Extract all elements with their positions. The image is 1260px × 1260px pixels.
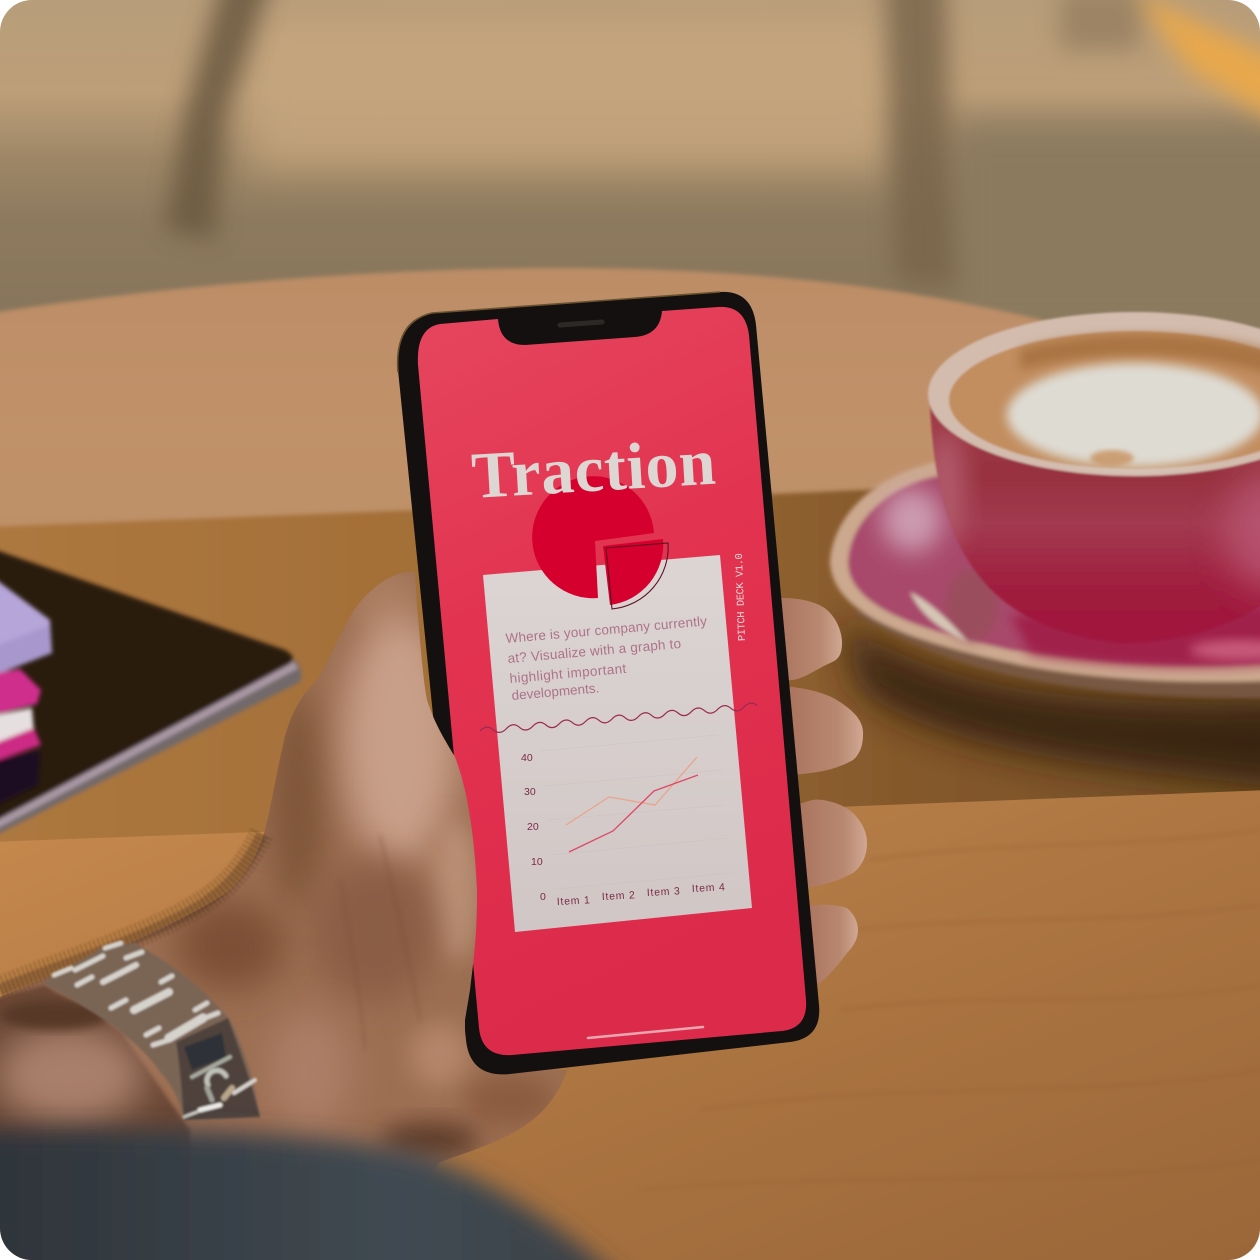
quarter outline	[606, 543, 668, 609]
cup rim	[928, 312, 1260, 476]
wood grain	[640, 830, 1260, 1190]
near wood plank	[0, 790, 1260, 1260]
cup body	[930, 405, 1260, 643]
tablet	[0, 548, 301, 838]
thumb and palm over phone edge	[0, 560, 590, 1220]
saucer rim	[830, 462, 1260, 682]
y axis labels: 30	[524, 786, 536, 798]
saucer	[830, 462, 1260, 698]
line chart	[521, 735, 732, 908]
saucer outer shadow band	[850, 610, 1260, 698]
y axis labels: 10	[531, 856, 543, 868]
x axis labels	[557, 881, 725, 908]
y axis labels: 20	[527, 821, 539, 833]
finger 3	[800, 800, 867, 887]
coffee cup	[925, 312, 1260, 643]
coffee surface	[949, 331, 1260, 469]
watch dark link	[184, 1033, 226, 1070]
body text	[505, 613, 708, 703]
pie quarter	[603, 539, 663, 605]
y axis labels	[521, 752, 546, 903]
blurred dark sleeve in foreground	[0, 1129, 640, 1260]
saucer well	[848, 476, 1260, 666]
stacked books	[0, 575, 52, 808]
body text: developments.	[511, 680, 600, 703]
middle wood plank	[0, 478, 1260, 860]
finger 2	[790, 686, 864, 774]
finger 1	[781, 598, 842, 680]
x axis labels: Item 1	[557, 894, 590, 908]
arm hair	[0, 833, 262, 990]
red series	[569, 775, 698, 852]
wavy divider	[480, 703, 757, 732]
finger 4	[810, 904, 858, 984]
x axis labels: Item 2	[602, 889, 635, 903]
home indicator	[588, 1027, 703, 1038]
phone metal edge	[398, 292, 720, 372]
orange series	[566, 757, 697, 825]
milk foam	[1007, 363, 1260, 467]
spoon	[910, 592, 968, 642]
pie shape	[532, 476, 654, 598]
hand back layer	[0, 575, 567, 1168]
x axis labels: Item 4	[692, 881, 725, 895]
x axis labels: Item 3	[647, 885, 680, 899]
slide card	[483, 555, 752, 932]
watch highlights	[54, 943, 255, 1117]
y axis labels: 0	[540, 891, 546, 903]
phone body	[398, 292, 819, 1074]
title: Traction	[470, 426, 717, 513]
body text: highlight important	[509, 661, 627, 686]
phone screen	[418, 307, 806, 1055]
background: blurred cafe	[0, 0, 1260, 360]
far table top	[0, 266, 1046, 530]
shadow under saucer	[840, 620, 1260, 790]
chart grid	[540, 735, 732, 889]
y axis labels: 40	[521, 752, 533, 764]
watch bracelet	[42, 943, 260, 1120]
body text: Where is your company currently	[505, 613, 708, 646]
phone speaker	[560, 322, 602, 325]
vertical pitch deck label: PITCH DECK V1.0	[734, 553, 749, 641]
body text: at? Visualize with a graph to	[507, 636, 682, 666]
